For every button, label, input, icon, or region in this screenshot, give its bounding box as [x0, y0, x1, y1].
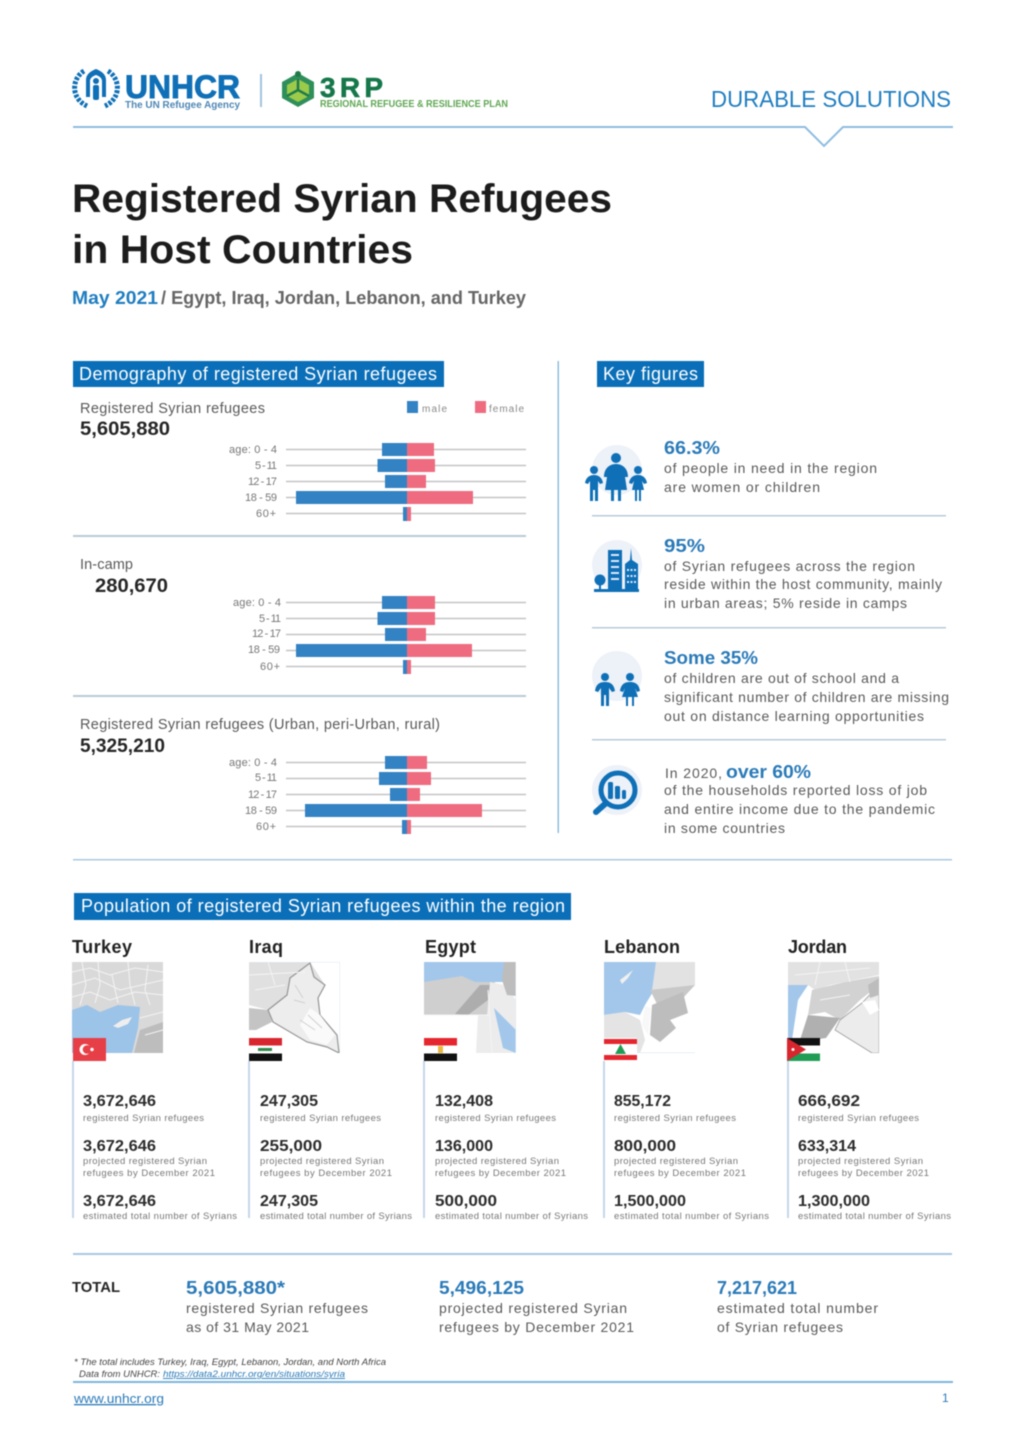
stats: Turkey: 3,672,646 — [83, 1138, 156, 1155]
stat: 95%: 95% — [664, 536, 705, 556]
chart: urban pyramid: 12 - 17 — [248, 789, 277, 801]
icon: children — [592, 651, 642, 706]
stat: 95%: of Syrian refugees across the region — [664, 558, 915, 574]
panel: totals: TOTAL — [72, 1279, 120, 1296]
footnote: * The total includes Turkey, Iraq, Egypt, Lebanon, Jordan, and North Africa — [74, 1357, 386, 1367]
footnote — [74, 1357, 386, 1379]
panel: Turkey: Turkey — [72, 937, 132, 957]
stats: Turkey: 3,672,646 — [83, 1093, 156, 1110]
chart: registered pyramid: 60+ — [256, 508, 276, 520]
map: Egypt — [424, 962, 516, 1053]
chart: in-camp pyramid — [233, 596, 526, 674]
stats: Egypt — [435, 1093, 588, 1222]
stats: Egypt: 500,000 — [435, 1193, 497, 1210]
stat: urban — [80, 717, 440, 757]
flag: Iraq — [249, 1038, 282, 1061]
stats: Lebanon: 855,172 — [614, 1093, 671, 1110]
total: estimated: 7,217,621 — [717, 1278, 797, 1298]
stats: Egypt: 136,000 — [435, 1138, 493, 1155]
title: Registered Syrian Refugees — [72, 177, 612, 221]
stats: Turkey: projected registered Syrian — [83, 1156, 207, 1167]
stat: 35%: significant number of children are missing — [664, 689, 949, 705]
icon: family — [585, 445, 647, 501]
stat: in-camp: 280,670 — [95, 576, 168, 597]
chart: registered pyramid: 12 - 17 — [248, 476, 277, 488]
total: projected — [439, 1278, 634, 1335]
icon: magnifier — [592, 765, 642, 815]
stats: Jordan: registered Syrian refugees — [798, 1113, 919, 1124]
chart: in-camp pyramid: 18 - 59 — [248, 644, 280, 656]
legend: female — [489, 404, 524, 415]
stat: 95%: reside within the host community, mainly — [664, 576, 942, 592]
panel: Iraq: Iraq — [249, 937, 283, 957]
stat: 95% — [664, 536, 942, 611]
total: registered: as of 31 May 2021 — [186, 1319, 309, 1335]
total: estimated: estimated total number — [717, 1300, 878, 1316]
stat: 35%: out on distance learning opportunities — [664, 708, 924, 724]
stats: Egypt: 132,408 — [435, 1093, 493, 1110]
panel: Jordan — [787, 937, 951, 1222]
panel: Turkey — [72, 937, 237, 1222]
stats: Iraq: estimated total number of Syrians — [260, 1211, 412, 1222]
total: estimated: of Syrian refugees — [717, 1319, 843, 1335]
stats: Turkey: registered Syrian refugees — [83, 1113, 204, 1124]
stat: urban: Registered Syrian refugees (Urban, peri-Urban, rural) — [80, 717, 440, 733]
panel: Lebanon — [603, 937, 769, 1222]
panel: Lebanon: Lebanon — [604, 937, 680, 957]
total: projected: 5,496,125 — [439, 1278, 524, 1298]
panel: Iraq — [248, 937, 412, 1222]
chart: in-camp pyramid: 12 - 17 — [252, 628, 281, 640]
stats: Lebanon: estimated total number of Syrians — [614, 1211, 769, 1222]
total: registered: 5,605,880* — [186, 1278, 285, 1298]
stat: 60%: In 2020, — [665, 765, 722, 781]
stats: Lebanon: 1,500,000 — [614, 1193, 686, 1210]
chart: registered pyramid: age: 0 - 4 — [229, 444, 277, 456]
subtitle: / Egypt, Iraq, Jordan, Lebanon, and Turkey — [161, 288, 526, 308]
footnote: Data from UNHCR: — [79, 1369, 161, 1379]
stats: Turkey: refugees by December 2021 — [83, 1168, 215, 1179]
stat: registered refugees: 5,605,880 — [80, 419, 170, 440]
map: Turkey — [72, 962, 163, 1053]
stats: Jordan: 1,300,000 — [798, 1193, 870, 1210]
heading: demography: Demography of registered Syrian refugees — [79, 364, 437, 384]
panel: totals — [72, 1278, 878, 1335]
stats: Iraq: refugees by December 2021 — [260, 1168, 392, 1179]
chart: registered pyramid — [229, 443, 526, 521]
stats: Egypt: registered Syrian refugees — [435, 1113, 556, 1124]
stats: Turkey — [83, 1093, 237, 1222]
total: registered — [186, 1278, 368, 1335]
stat: 35%: of children are out of school and a — [664, 670, 899, 686]
logo: 3RP: REGIONAL REFUGEE & RESILIENCE PLAN — [320, 99, 508, 110]
stats: Lebanon: projected registered Syrian — [614, 1156, 738, 1167]
heading: key figures: Key figures — [603, 364, 698, 384]
stats: Egypt: refugees by December 2021 — [435, 1168, 566, 1179]
flag: Lebanon — [604, 1038, 637, 1061]
stats: Egypt: projected registered Syrian — [435, 1156, 559, 1167]
stats: Iraq: 247,305 — [260, 1093, 318, 1110]
header logos — [75, 69, 508, 111]
chart: urban pyramid: 18 - 59 — [245, 805, 277, 817]
chart: registered pyramid: 5 - 11 — [255, 460, 277, 472]
footnote: https://data2.unhcr.org/en/situations/syria — [163, 1369, 345, 1379]
legend: male — [422, 404, 447, 415]
flag: Turkey — [73, 1038, 106, 1061]
stat: 95%: in urban areas; 5% reside in camps — [664, 595, 907, 611]
flag: Jordan — [787, 1038, 820, 1061]
chart: urban pyramid — [229, 756, 526, 834]
stat: 60%: and entire income due to the pandemic — [664, 801, 935, 817]
stats: Jordan: estimated total number of Syrians — [798, 1211, 951, 1222]
stat: 60%: in some countries — [664, 820, 785, 836]
title — [72, 177, 612, 272]
stat: 66.3%: are women or children — [664, 479, 820, 495]
chart: urban pyramid: 5 - 11 — [255, 772, 277, 784]
stat: registered refugees: Registered Syrian refugees — [80, 401, 265, 417]
chart: in-camp pyramid: 5 - 11 — [259, 613, 281, 625]
panel: Egypt: Egypt — [425, 937, 476, 957]
logo: 3RP: 3RP — [320, 72, 383, 103]
stat: 60%: over 60% — [726, 762, 811, 782]
map: Lebanon — [604, 962, 695, 1053]
stats: Iraq: 247,305 — [260, 1193, 318, 1210]
stat: 35%: Some 35% — [664, 648, 758, 668]
chart: in-camp pyramid: 60+ — [260, 661, 280, 673]
stat: 35% — [664, 648, 949, 724]
panel: key figures — [585, 361, 949, 836]
chart: urban pyramid: age: 0 - 4 — [229, 757, 277, 769]
flag: Egypt — [424, 1038, 457, 1061]
panel: demography — [73, 361, 526, 834]
heading: population: Population of registered Syrian refugees within the region — [81, 896, 565, 916]
icon: city — [592, 540, 642, 592]
footer link: www.unhcr.org — [73, 1391, 164, 1406]
stats: Lebanon: 800,000 — [614, 1138, 676, 1155]
stats: Jordan: refugees by December 2021 — [798, 1168, 929, 1179]
stats: Iraq: projected registered Syrian — [260, 1156, 384, 1167]
stat: urban: 5,325,210 — [80, 736, 165, 757]
heading: key figures — [597, 361, 704, 387]
stats: Iraq: registered Syrian refugees — [260, 1113, 381, 1124]
stat: 60%: of the households reported loss of job — [664, 782, 927, 798]
panel: Jordan: Jordan — [788, 937, 847, 957]
stats: Jordan: 633,314 — [798, 1138, 856, 1155]
stat: registered refugees — [80, 401, 265, 440]
stat: 66.3%: 66.3% — [664, 438, 720, 458]
stats: Turkey: estimated total number of Syrians — [83, 1211, 237, 1222]
stat: 66.3% — [664, 438, 877, 495]
stats: Jordan: 666,692 — [798, 1093, 860, 1110]
subtitle: May 2021 — [72, 288, 158, 308]
header rule with notch — [73, 127, 953, 146]
stats: Iraq: 255,000 — [260, 1138, 322, 1155]
stats: Egypt: estimated total number of Syrians — [435, 1211, 588, 1222]
chart: urban pyramid: 60+ — [256, 821, 276, 833]
stat: 66.3%: of people in need in the region — [664, 460, 877, 476]
stat: 60% — [664, 762, 935, 836]
stats: Lebanon: registered Syrian refugees — [614, 1113, 736, 1124]
stats: Lebanon: refugees by December 2021 — [614, 1168, 746, 1179]
chart: in-camp pyramid: age: 0 - 4 — [233, 597, 281, 609]
chart: registered pyramid: 18 - 59 — [245, 492, 277, 504]
map: Jordan — [788, 962, 879, 1053]
logo: UNHCR — [75, 69, 240, 111]
title: in Host Countries — [72, 228, 413, 272]
stats: Jordan — [798, 1093, 951, 1222]
stats: Lebanon — [614, 1093, 769, 1222]
stats: Jordan: projected registered Syrian — [798, 1156, 923, 1167]
logo: UNHCR: UNHCR — [125, 69, 240, 105]
total: projected: refugees by December 2021 — [439, 1319, 634, 1335]
total: estimated — [717, 1278, 878, 1335]
legend — [407, 401, 524, 415]
total: registered: registered Syrian refugees — [186, 1300, 368, 1316]
stats: Turkey: 3,672,646 — [83, 1193, 156, 1210]
total: projected: projected registered Syrian — [439, 1300, 627, 1316]
stat: in-camp: In-camp — [80, 557, 133, 573]
map: Iraq — [249, 962, 340, 1053]
stat: in-camp — [80, 557, 168, 597]
page number: 1 — [942, 1391, 949, 1405]
stats: Iraq — [260, 1093, 412, 1222]
heading: durable solutions: DURABLE SOLUTIONS — [711, 86, 951, 112]
panel: Egypt — [423, 937, 588, 1222]
logo: 3RP — [282, 71, 508, 110]
logo: UNHCR: The UN Refugee Agency — [125, 100, 240, 111]
